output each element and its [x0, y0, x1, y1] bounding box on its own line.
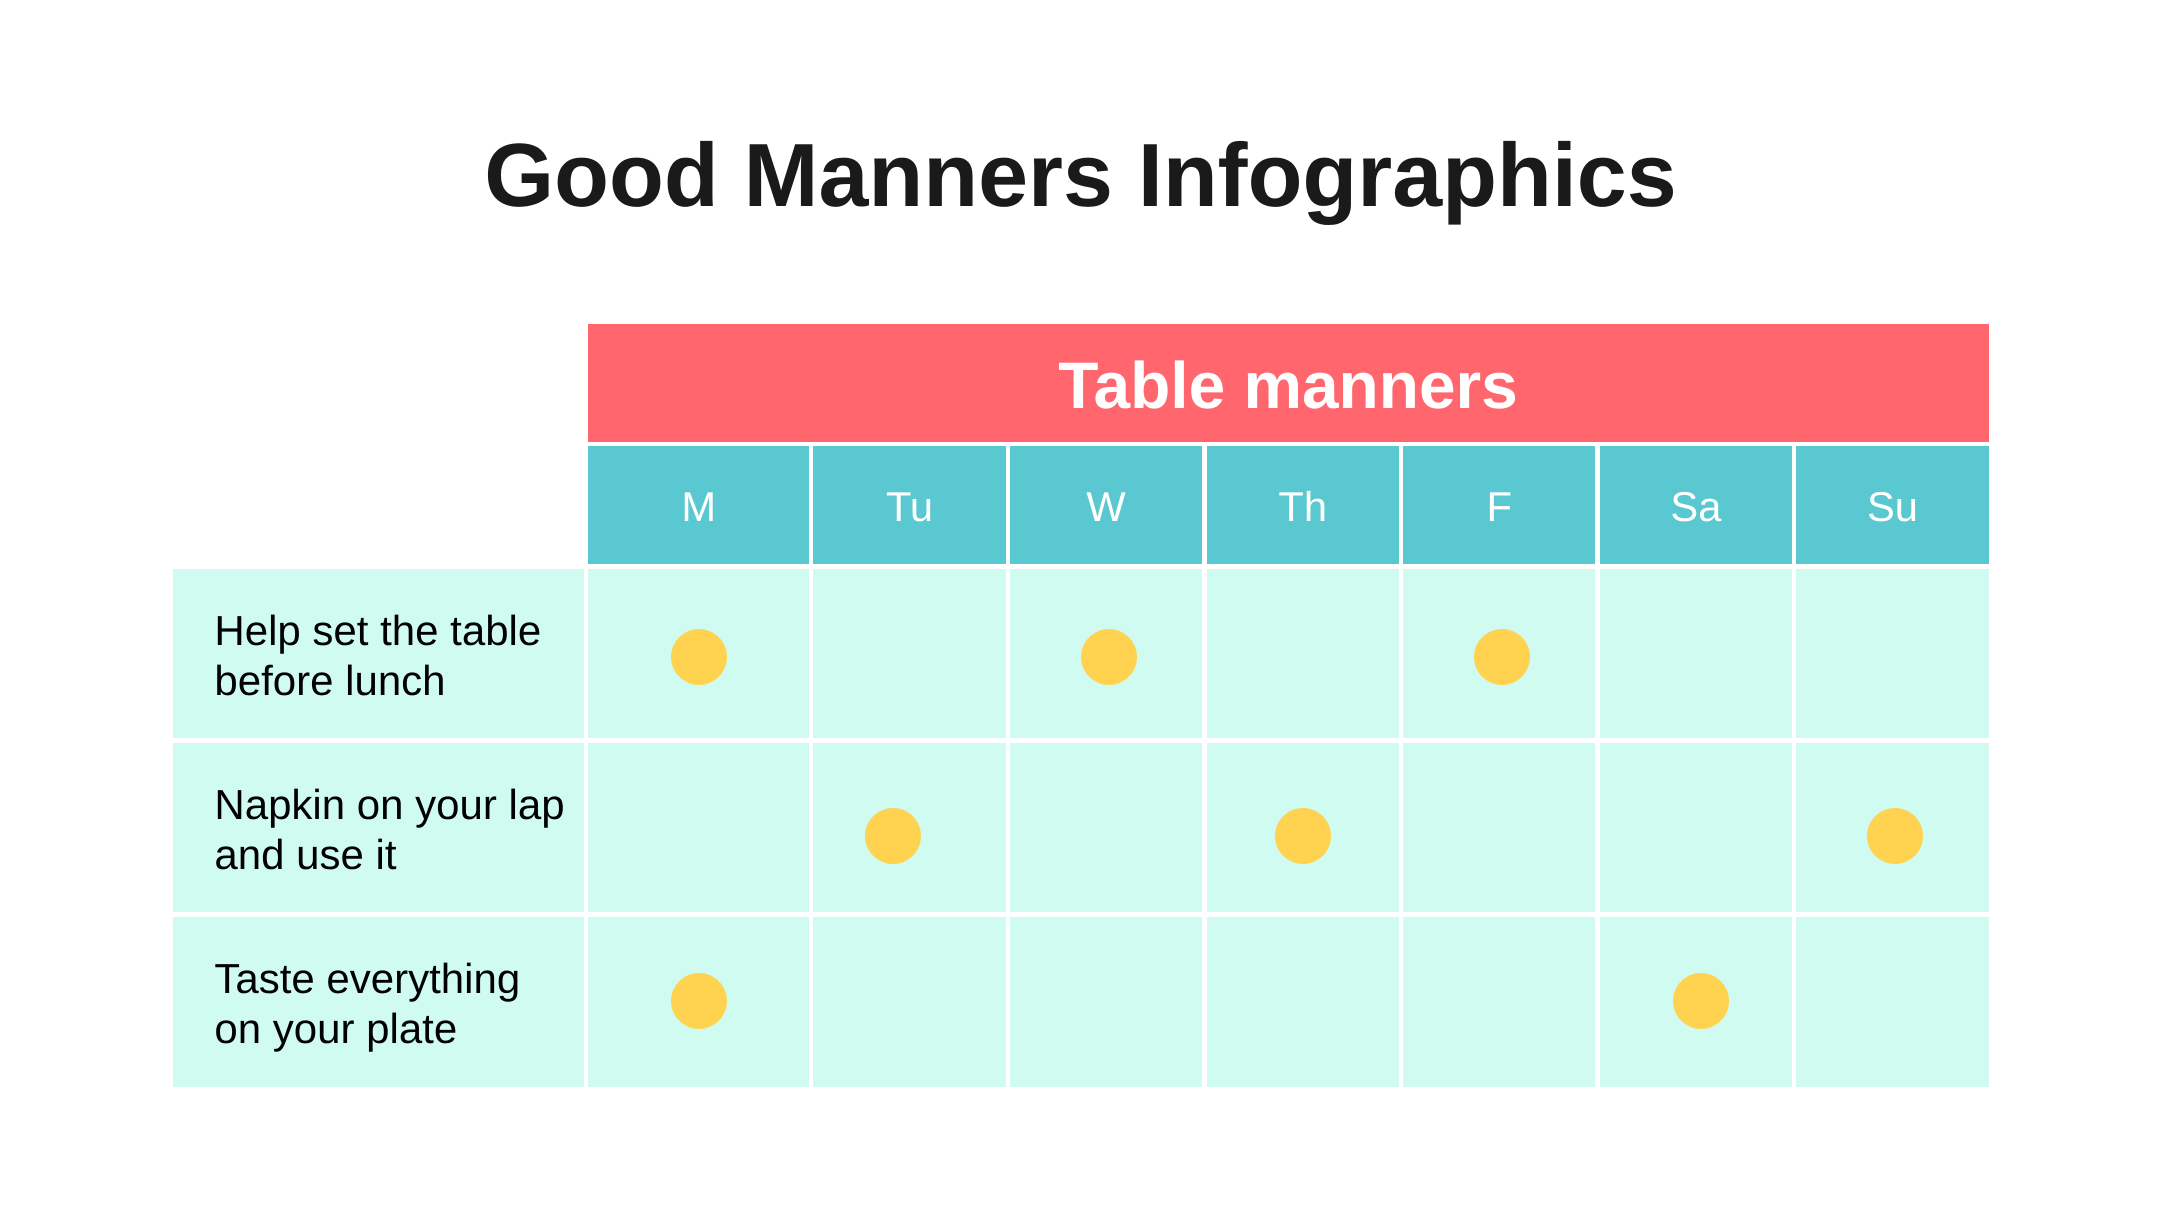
row label: Help set the table [173, 569, 584, 738]
day header: Wednesday: W [1086, 483, 1126, 530]
dot: row 2 Thursday [1275, 808, 1331, 864]
day header: Wednesday [1010, 446, 1202, 564]
row label: Taste everything [173, 917, 584, 1087]
day header: Thursday [1207, 446, 1399, 564]
heading: Table manners [588, 324, 1989, 442]
day header: Tuesday [813, 446, 1006, 564]
heading: Table manners: Table manners [1058, 348, 1518, 422]
day header: Saturday: Sa [1670, 483, 1721, 530]
day header: Sunday [1796, 446, 1989, 564]
row label: Taste everything: Taste everything [214, 955, 520, 1002]
row 2 cells [588, 743, 1989, 912]
dot: row 1 Wednesday [1080, 629, 1136, 685]
row label: Help set the table: before lunch [214, 657, 446, 704]
day header: Friday: F [1487, 483, 1512, 530]
day header: Monday [588, 446, 809, 564]
dot: row 3 Saturday [1672, 973, 1728, 1029]
row 1 cells [588, 569, 1989, 738]
row 3 cells [588, 917, 1989, 1087]
table [173, 324, 1989, 1087]
day header: Tuesday: Tu [886, 483, 933, 530]
dot: row 3 Monday [671, 973, 727, 1029]
day header: Sunday: Su [1867, 483, 1918, 530]
day header: Friday [1403, 446, 1595, 564]
row label: Napkin on your lap [173, 743, 584, 912]
row label: Taste everything: on your plate [214, 1005, 457, 1052]
row label: Help set the table: Help set the table [214, 607, 541, 654]
dot: row 2 Tuesday [865, 808, 921, 864]
dot: row 1 Monday [671, 629, 727, 685]
day header: Saturday [1600, 446, 1792, 564]
day header: Monday: M [681, 483, 716, 530]
dot: row 1 Friday [1474, 629, 1530, 685]
title: Good Manners Infographics [484, 126, 1677, 226]
day header: Thursday: Th [1278, 483, 1327, 530]
row label: Napkin on your lap: Napkin on your lap [214, 781, 565, 828]
dot: row 2 Sunday [1866, 808, 1922, 864]
row label: Napkin on your lap: and use it [214, 831, 397, 878]
